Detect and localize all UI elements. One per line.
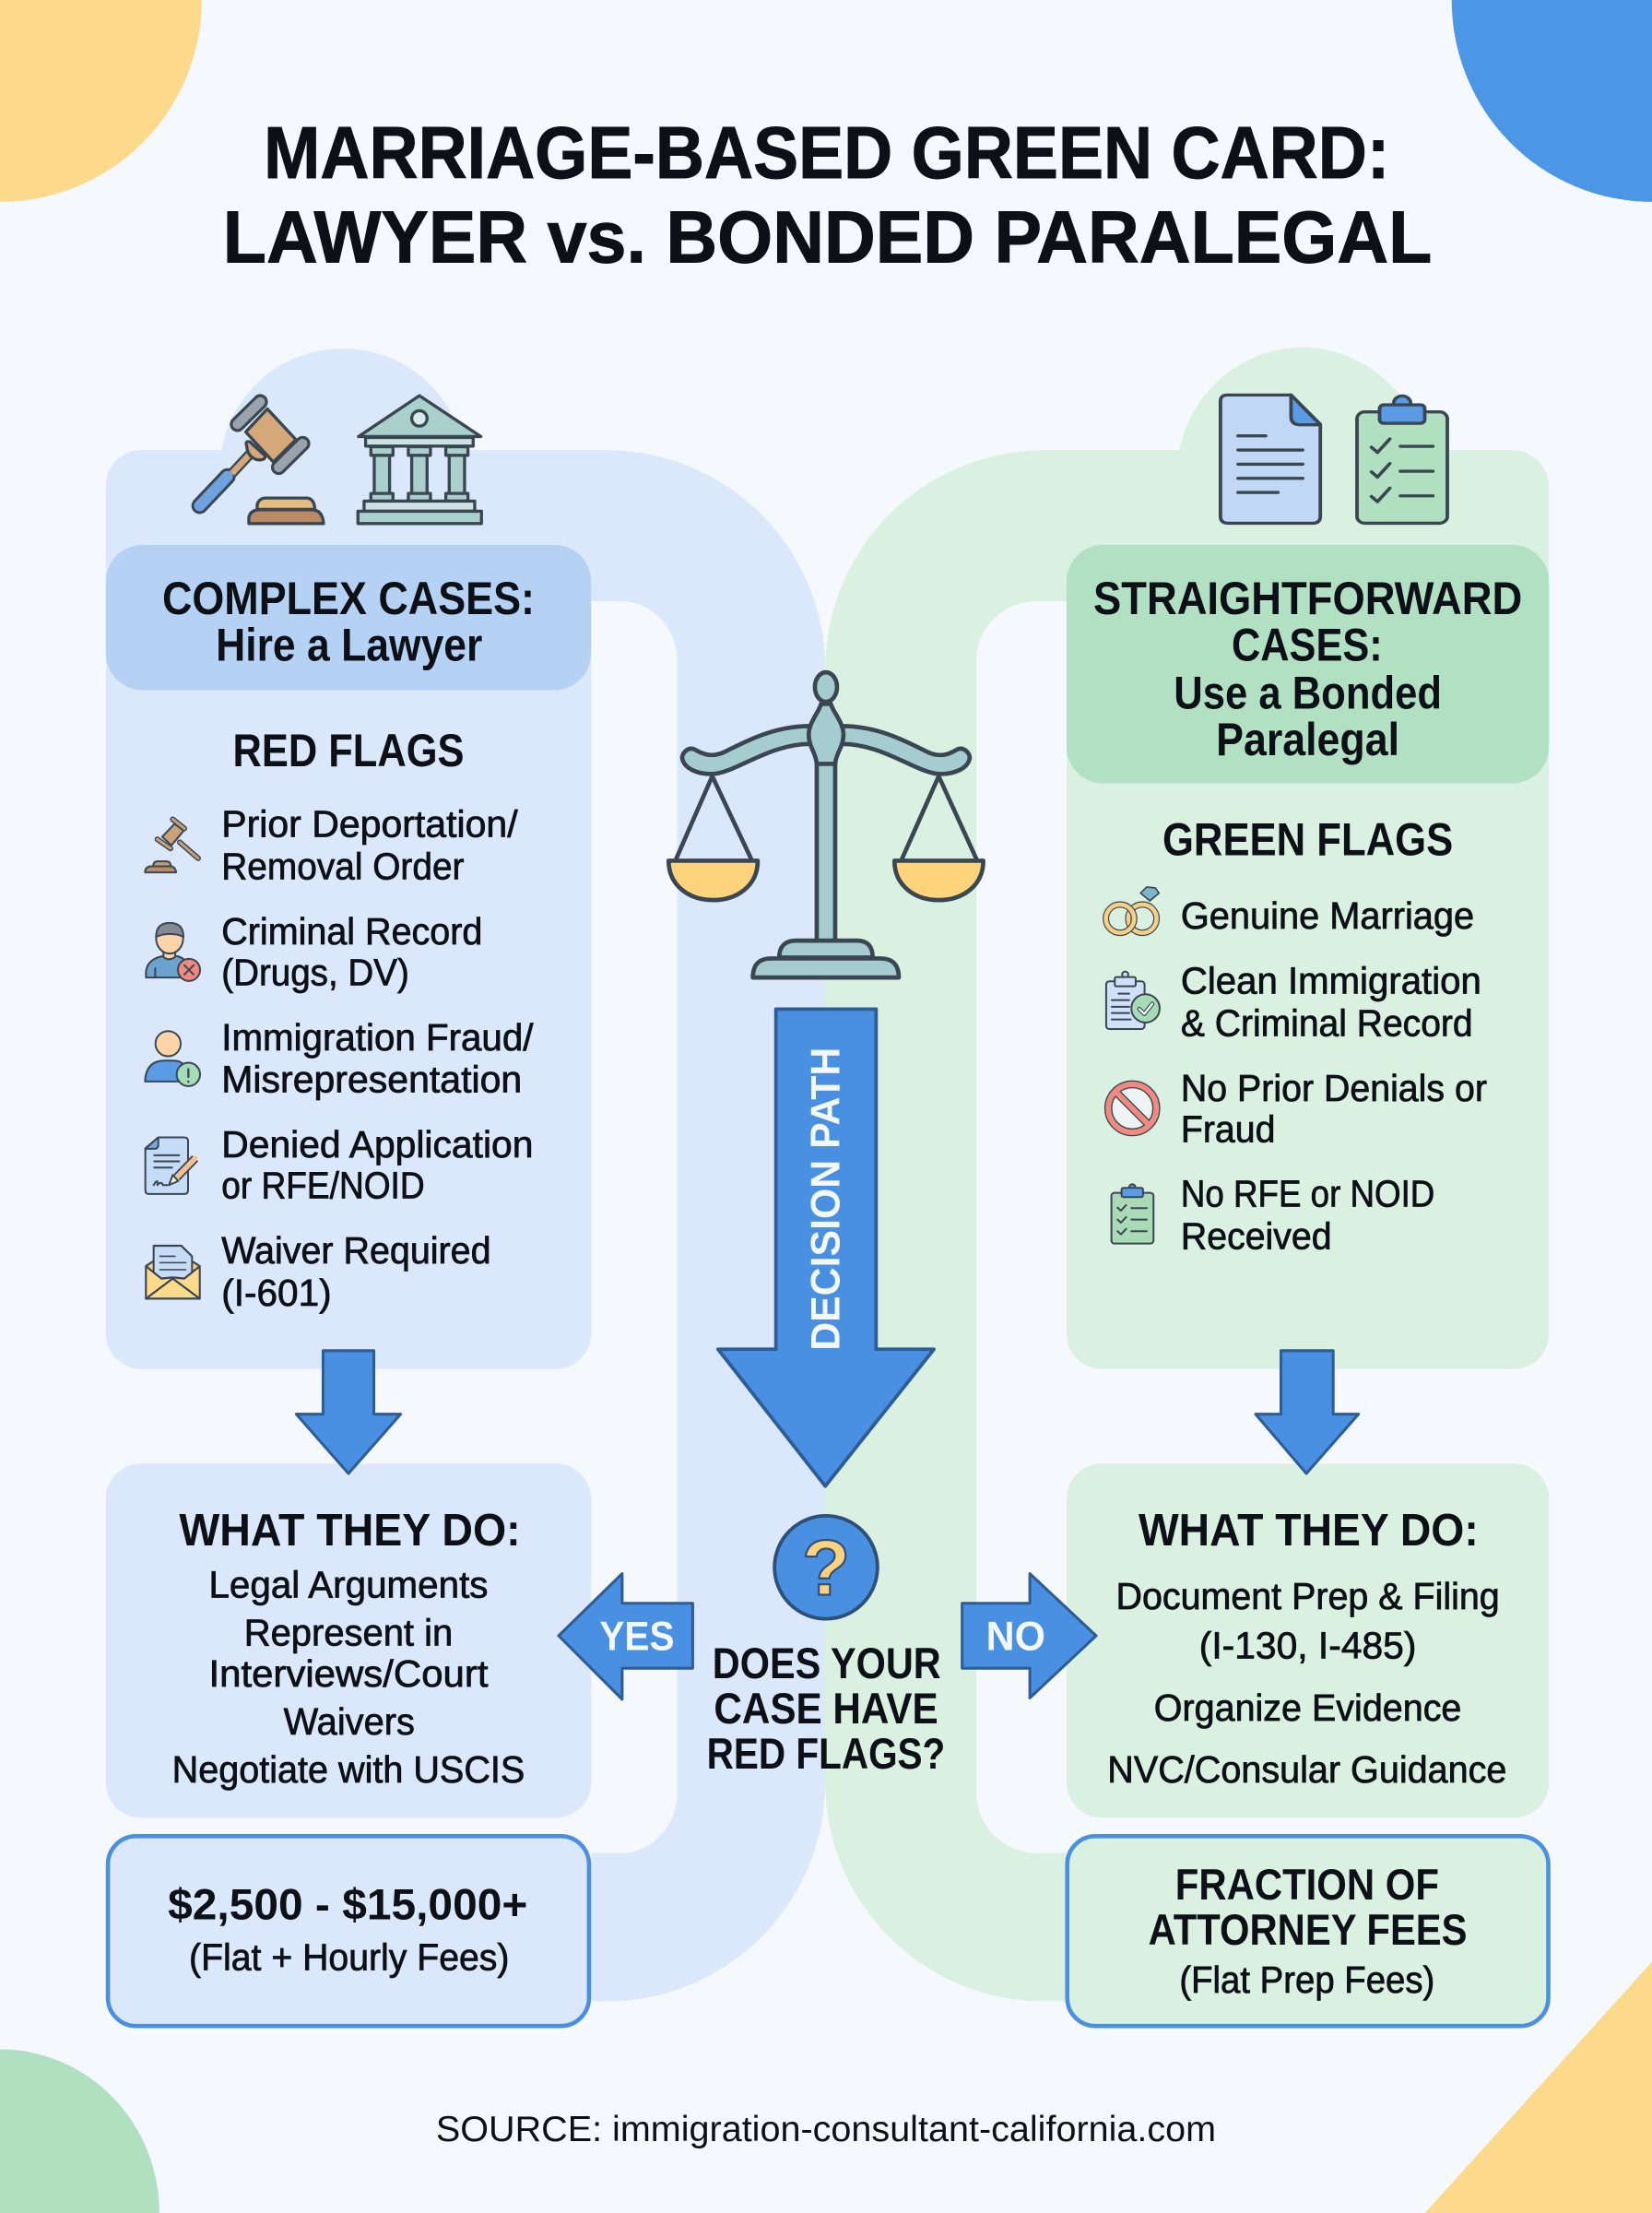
arrow: yes: YES bbox=[599, 1614, 674, 1659]
item: denied application: or RFE/NOID bbox=[221, 1164, 425, 1206]
panel: paralegal what they do: (I-130, I-485) bbox=[1199, 1624, 1416, 1666]
panel: straightforward cases header: Paralegal bbox=[1216, 713, 1399, 765]
corner decoration: green circle bottom-left bbox=[0, 2049, 159, 2213]
item: no rfe or noid: Received bbox=[1181, 1215, 1332, 1258]
icon: wedding rings bbox=[1106, 887, 1159, 933]
title bbox=[223, 112, 1432, 278]
text: decision question: DOES YOUR bbox=[713, 1639, 941, 1688]
icon: clipboard checklist bbox=[1357, 396, 1447, 523]
title: MARRIAGE-BASED GREEN CARD: bbox=[264, 112, 1389, 194]
panel: paralegal what they do: WHAT THEY DO: bbox=[1139, 1506, 1479, 1556]
label: decision path: DECISION PATH bbox=[804, 1047, 849, 1351]
panel: straightforward cases header bbox=[1067, 545, 1549, 783]
heading: red flags: RED FLAGS bbox=[233, 724, 464, 776]
panel: paralegal what they do: NVC/Consular Guidance bbox=[1107, 1748, 1506, 1791]
callout: paralegal cost: ATTORNEY FEES bbox=[1149, 1906, 1468, 1955]
item: no prior denials: Fraud bbox=[1181, 1107, 1275, 1150]
source line: SOURCE: immigration-consultant-california.com bbox=[436, 2110, 1216, 2149]
panel: lawyer what they do: Interviews/Court bbox=[208, 1652, 488, 1695]
panel: complex cases header: Hire a Lawyer bbox=[216, 618, 482, 670]
callout: lawyer cost: $2,500 - $15,000+ bbox=[168, 1881, 527, 1930]
item: clean immigration: Clean Immigration bbox=[1181, 960, 1481, 1002]
panel: straightforward cases header: CASES: bbox=[1232, 618, 1383, 670]
item: criminal record bbox=[221, 910, 482, 993]
callout: paralegal cost bbox=[1068, 1836, 1549, 2026]
panel: straightforward cases header: Use a Bonded bbox=[1174, 666, 1442, 718]
item: prior deportation: Prior Deportation/ bbox=[221, 803, 518, 846]
item: no prior denials bbox=[1181, 1067, 1487, 1150]
icon: person with x bbox=[146, 923, 200, 981]
icon: question mark bbox=[774, 1516, 878, 1619]
panel: straightforward cases header: STRAIGHTFORWARD bbox=[1093, 572, 1522, 624]
item: prior deportation bbox=[221, 803, 518, 888]
item: waiver required: Waiver Required bbox=[221, 1229, 491, 1272]
icon: balance scales bbox=[668, 672, 984, 977]
icon: small gavel bbox=[145, 819, 198, 872]
heading: green flags: GREEN FLAGS bbox=[1162, 813, 1453, 866]
text: decision question: RED FLAGS? bbox=[707, 1730, 945, 1779]
item: immigration fraud: Misrepresentation bbox=[221, 1059, 522, 1101]
item: clean immigration: & Criminal Record bbox=[1181, 1001, 1473, 1044]
panel: complex cases header: COMPLEX CASES: bbox=[162, 572, 535, 624]
corner decoration: yellow circle top-left bbox=[0, 0, 202, 202]
arrow: paralegal path down bbox=[1256, 1351, 1359, 1473]
item: denied application bbox=[221, 1123, 533, 1206]
item: waiver required bbox=[221, 1229, 491, 1314]
icon: person with warning bbox=[145, 1031, 200, 1086]
callout: lawyer cost: (Flat + Hourly Fees) bbox=[189, 1936, 509, 1979]
arrow: lawyer path down bbox=[296, 1351, 401, 1473]
item: clean immigration bbox=[1181, 960, 1481, 1044]
callout: lawyer cost bbox=[108, 1836, 589, 2026]
icon: clipboard with check bbox=[1106, 972, 1160, 1029]
panel: paralegal what they do: Organize Evidence bbox=[1154, 1686, 1461, 1729]
text: decision question: CASE HAVE bbox=[714, 1685, 938, 1734]
icon: small checklist bbox=[1112, 1184, 1153, 1244]
icon: document with pen bbox=[146, 1138, 195, 1194]
item: no prior denials: No Prior Denials or bbox=[1181, 1067, 1487, 1109]
callout: paralegal cost: FRACTION OF bbox=[1175, 1861, 1439, 1910]
panel: lawyer what they do: Waivers bbox=[284, 1700, 415, 1743]
panel: paralegal what they do: Document Prep & Filing bbox=[1115, 1575, 1500, 1617]
item: waiver required: (I-601) bbox=[221, 1272, 332, 1314]
panel: lawyer what they do: Negotiate with USCIS bbox=[172, 1748, 525, 1791]
corner decoration: blue circle top-right bbox=[1452, 0, 1652, 202]
item: criminal record: (Drugs, DV) bbox=[221, 951, 409, 993]
arrow: no bbox=[962, 1574, 1096, 1698]
item: genuine marriage: Genuine Marriage bbox=[1181, 894, 1474, 937]
icon: prohibited sign bbox=[1108, 1084, 1156, 1132]
text: decision question bbox=[707, 1639, 945, 1779]
green decision path band bbox=[825, 348, 1549, 2001]
list: red flags bbox=[145, 803, 534, 1314]
panel: complex cases header bbox=[106, 545, 591, 690]
panel: lawyer what they do: Represent in bbox=[244, 1612, 453, 1654]
arrow: decision path bbox=[718, 1009, 934, 1486]
item: criminal record: Criminal Record bbox=[221, 910, 482, 953]
icon: document bbox=[1221, 395, 1320, 523]
callout: paralegal cost: (Flat Prep Fees) bbox=[1179, 1959, 1434, 2001]
panel: lawyer what they do bbox=[106, 1463, 591, 1817]
arrow: yes bbox=[559, 1574, 692, 1699]
icon: courthouse bbox=[358, 396, 481, 524]
item: no rfe or noid bbox=[1181, 1173, 1434, 1258]
icon: question mark: ? bbox=[802, 1524, 850, 1613]
panel: paralegal what they do bbox=[1067, 1463, 1549, 1817]
blue decision path band bbox=[106, 349, 825, 2001]
item: immigration fraud: Immigration Fraud/ bbox=[221, 1016, 534, 1059]
panel: lawyer what they do: Legal Arguments bbox=[208, 1564, 488, 1606]
icon: envelope bbox=[146, 1246, 200, 1298]
arrow: no: NO bbox=[986, 1614, 1045, 1659]
item: prior deportation: Removal Order bbox=[221, 846, 464, 888]
icon: gavel bbox=[200, 402, 324, 524]
panel: lawyer what they do: WHAT THEY DO: bbox=[179, 1506, 521, 1556]
item: immigration fraud bbox=[221, 1016, 534, 1101]
list: green flags bbox=[1106, 887, 1487, 1258]
item: no rfe or noid: No RFE or NOID bbox=[1181, 1173, 1434, 1215]
item: denied application: Denied Application bbox=[221, 1123, 533, 1166]
title: LAWYER vs. BONDED PARALEGAL bbox=[223, 196, 1432, 278]
corner decoration: yellow triangle bottom-right bbox=[1425, 1962, 1652, 2213]
